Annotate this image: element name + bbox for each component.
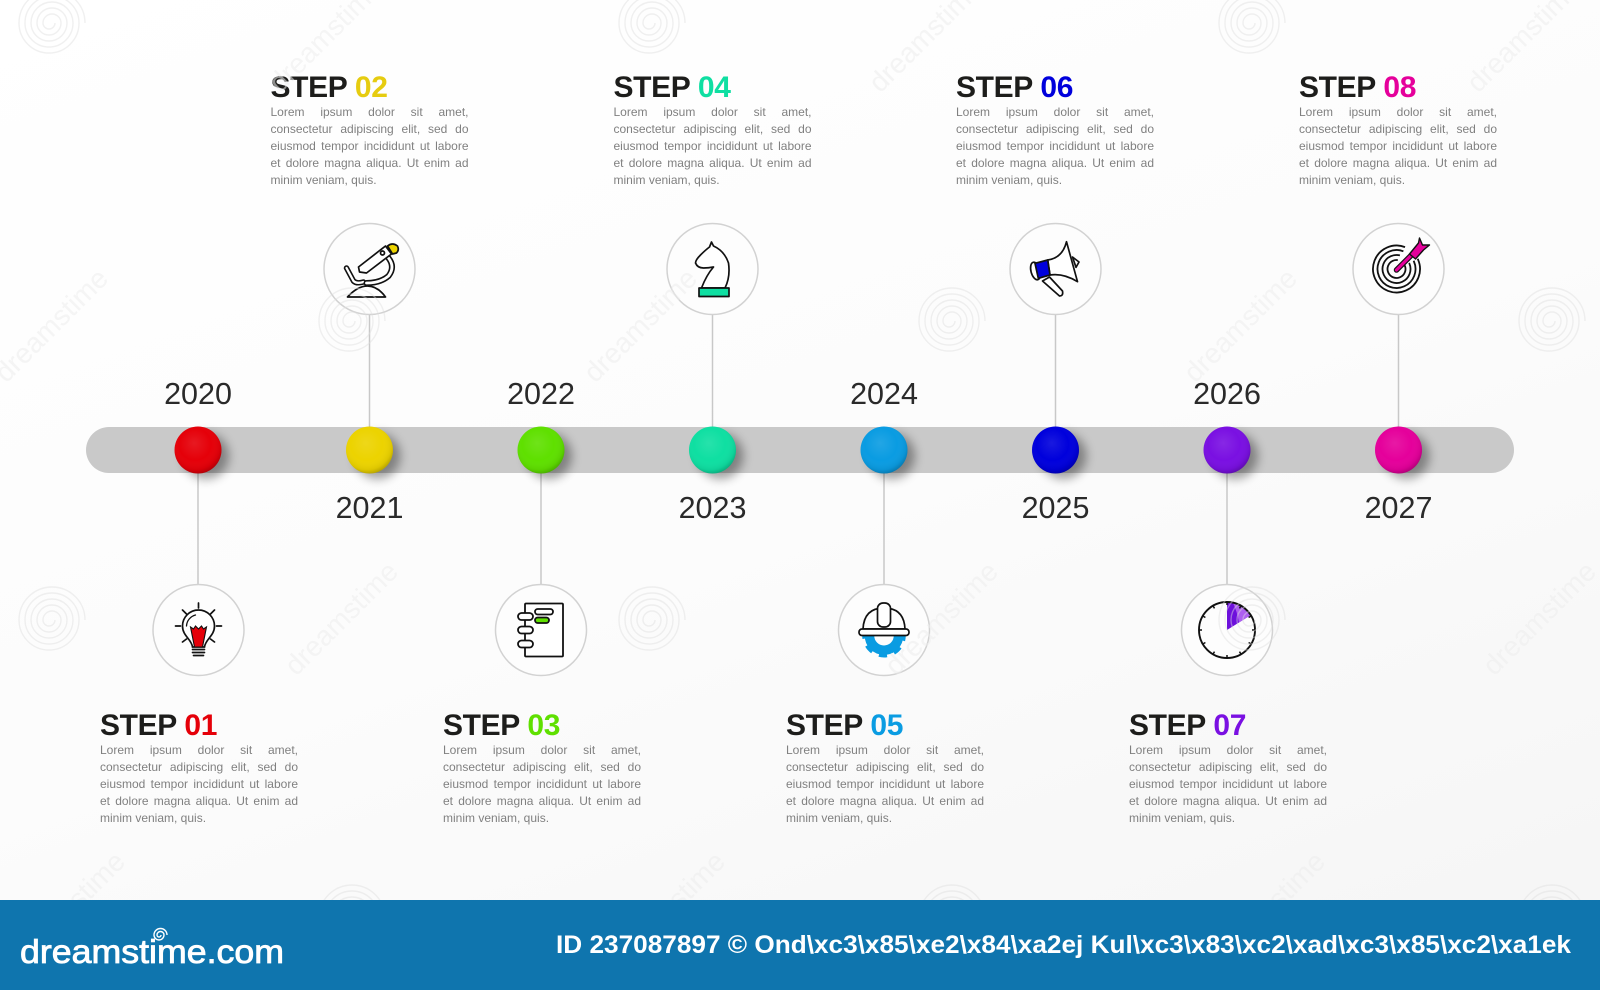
step 02 block: STEP 02: [270, 71, 388, 104]
icon: megaphone: [1010, 224, 1101, 314]
watermark pattern: dreamstime: [879, 556, 1004, 681]
step 06 block: [956, 71, 1154, 187]
step 06 block: eiusmod tempor incididunt ut labore: [956, 139, 1154, 153]
step 08 block: Lorem ipsum dolor sit amet,: [1299, 105, 1497, 119]
step 06 block: Lorem ipsum dolor sit amet,: [956, 105, 1154, 119]
watermark pattern: dreamstime: [578, 263, 703, 388]
step 05 block: consectetur adipiscing elit, sed do: [786, 760, 984, 774]
icon: helmet and gear: [838, 584, 930, 676]
year labels: 2022: [507, 377, 575, 411]
step 05 block: eiusmod tempor incididunt ut labore: [786, 777, 984, 791]
step 07 block: eiusmod tempor incididunt ut labore: [1129, 777, 1327, 791]
ball 2022 green: [518, 426, 572, 479]
step 08 block: consectetur adipiscing elit, sed do: [1299, 122, 1497, 136]
watermark pattern: dreamstime: [279, 556, 404, 681]
year labels: 2026: [1193, 377, 1261, 411]
step 01 block: [100, 709, 298, 825]
ball 2023 teal: [689, 426, 744, 479]
step 02 block: consectetur adipiscing elit, sed do: [270, 122, 468, 136]
year labels: 2024: [850, 377, 918, 411]
ball 2027 magenta: [1375, 426, 1430, 479]
step 08 block: STEP 08: [1299, 71, 1416, 104]
step 08 block: [1299, 71, 1497, 187]
step 04 block: [614, 71, 812, 187]
year labels: 2021: [336, 491, 403, 525]
watermark pattern: dreamstime: [6, 846, 131, 971]
step 07 block: consectetur adipiscing elit, sed do: [1129, 760, 1327, 774]
timeline track: [86, 427, 1514, 473]
step 05 block: minim veniam, quis.: [786, 811, 892, 825]
step 04 block: consectetur adipiscing elit, sed do: [614, 122, 812, 136]
step 06 block: et dolore magna aliqua. Ut enim ad: [956, 156, 1154, 170]
step 01 block: STEP 01: [100, 709, 217, 742]
icon: light bulb: [153, 584, 244, 676]
footer bar: [0, 900, 1600, 990]
step 03 block: et dolore magna aliqua. Ut enim ad: [443, 794, 641, 808]
icon: stopwatch clock: [1182, 584, 1272, 676]
step 02 block: Lorem ipsum dolor sit amet,: [270, 105, 468, 119]
step 01 block: Lorem ipsum dolor sit amet,: [100, 743, 298, 757]
step 05 block: STEP 05: [786, 709, 903, 742]
step 03 block: [443, 709, 641, 825]
icon: microscope: [324, 224, 415, 314]
ball 2024 sky blue: [860, 426, 915, 479]
ball 2026 purple: [1204, 426, 1258, 479]
step 02 block: et dolore magna aliqua. Ut enim ad: [270, 156, 468, 170]
timeline graphic: [86, 222, 1514, 676]
year labels: 2027: [1365, 491, 1432, 525]
step 01 block: minim veniam, quis.: [100, 811, 206, 825]
step 05 block: et dolore magna aliqua. Ut enim ad: [786, 794, 984, 808]
step 08 block: minim veniam, quis.: [1299, 173, 1405, 187]
step 04 block: eiusmod tempor incididunt ut labore: [614, 139, 812, 153]
step 08 block: et dolore magna aliqua. Ut enim ad: [1299, 156, 1497, 170]
step 07 block: minim veniam, quis.: [1129, 811, 1235, 825]
step 08 block: eiusmod tempor incididunt ut labore: [1299, 139, 1497, 153]
step 04 block: minim veniam, quis.: [614, 173, 720, 187]
ball 2025 blue: [1032, 426, 1086, 479]
step 01 block: eiusmod tempor incididunt ut labore: [100, 777, 298, 791]
step 07 block: Lorem ipsum dolor sit amet,: [1129, 743, 1327, 757]
year labels: 2025: [1022, 491, 1089, 525]
step 04 block: Lorem ipsum dolor sit amet,: [614, 105, 812, 119]
step 07 block: [1129, 709, 1327, 825]
step 01 block: et dolore magna aliqua. Ut enim ad: [100, 794, 298, 808]
footer credit: ID 237087897 © Ond\xc3\x85\xe2\x84\xa2ej Kul\xc3\x83\xc2\xad\xc3\x85\xc2\xa1ek: [556, 931, 1571, 959]
step 06 block: minim veniam, quis.: [956, 173, 1062, 187]
step 03 block: minim veniam, quis.: [443, 811, 549, 825]
step 02 block: minim veniam, quis.: [270, 173, 377, 187]
icon: target and arrow: [1353, 224, 1444, 314]
ball 2021 yellow: [346, 426, 400, 479]
step 03 block: eiusmod tempor incididunt ut labore: [443, 777, 641, 791]
connector lines: [198, 315, 1398, 584]
step 03 block: Lorem ipsum dolor sit amet,: [443, 743, 641, 757]
step 05 block: [786, 709, 984, 825]
step 03 block: STEP 03: [443, 709, 560, 742]
step 06 block: consectetur adipiscing elit, sed do: [956, 122, 1154, 136]
year labels: [164, 377, 1432, 525]
watermark pattern: dreamstime: [1178, 263, 1303, 388]
footer logo: dreamstime.com: [20, 933, 284, 970]
icon: notebook: [496, 584, 586, 676]
step 02 block: [270, 71, 468, 187]
step 04 block: et dolore magna aliqua. Ut enim ad: [614, 156, 812, 170]
watermark pattern: dreamstime: [606, 846, 731, 971]
ball 2020 red: [174, 426, 229, 479]
step 05 block: Lorem ipsum dolor sit amet,: [786, 743, 984, 757]
step 03 block: consectetur adipiscing elit, sed do: [443, 760, 641, 774]
icon: knight: [667, 224, 758, 314]
year labels: 2020: [164, 377, 232, 411]
step 07 block: et dolore magna aliqua. Ut enim ad: [1129, 794, 1327, 808]
step 02 block: eiusmod tempor incididunt ut labore: [270, 139, 468, 153]
step 04 block: STEP 04: [614, 71, 731, 104]
watermark pattern: dreamstime: [1477, 556, 1600, 681]
step 07 block: STEP 07: [1129, 709, 1246, 742]
year labels: 2023: [679, 491, 746, 525]
step 06 block: STEP 06: [956, 71, 1073, 104]
step 01 block: consectetur adipiscing elit, sed do: [100, 760, 298, 774]
watermark pattern: dreamstime: [1206, 846, 1331, 971]
